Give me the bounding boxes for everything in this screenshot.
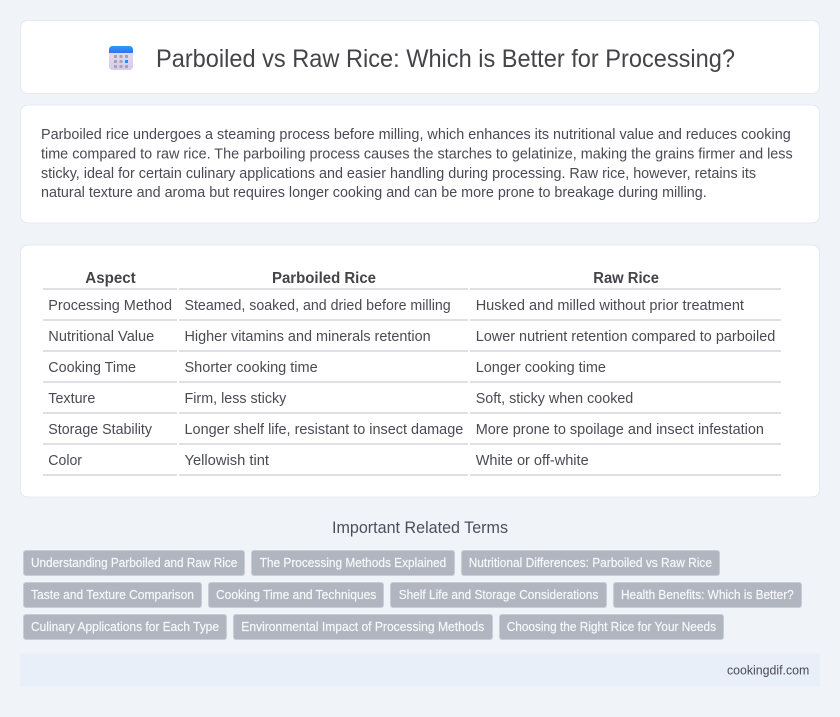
title: Parboiled vs Raw Rice: Which is Better for Processing?	[156, 45, 735, 73]
tag row 1: Understanding Parboiled and Raw Rice	[31, 556, 237, 570]
footer bar	[20, 654, 820, 686]
footer source text: cookingdif.com	[727, 662, 809, 677]
tag row 3: Choosing the Right Rice for Your Needs	[507, 620, 716, 634]
icon: calendar	[109, 46, 133, 70]
tag row 2: Cooking Time and Techniques	[216, 588, 376, 602]
panel: comparison table	[20, 245, 820, 497]
table header row: Parboiled Rice	[272, 270, 376, 287]
table row: storage stability: Storage Stability	[48, 422, 153, 438]
table header row: Aspect	[85, 270, 136, 287]
table row: cooking time: Cooking Time	[48, 360, 136, 376]
tag row 3: Environmental Impact of Processing Methods	[241, 620, 484, 634]
table row: color: Yellowish tint	[184, 453, 269, 469]
table row: texture	[43, 391, 781, 414]
table row: nutritional value	[43, 329, 781, 352]
tag row 2: Shelf Life and Storage Considerations	[399, 588, 598, 602]
panel: header	[20, 20, 820, 94]
tag row 3: Culinary Applications for Each Type	[31, 620, 219, 634]
table row: cooking time: Shorter cooking time	[184, 360, 318, 376]
tag row 2: Health Benefits: Which is Better?	[621, 588, 794, 602]
table row: color: White or off-white	[476, 453, 589, 469]
table row: storage stability: Longer shelf life, resistant to insect damage	[184, 422, 463, 438]
table row: texture: Soft, sticky when cooked	[476, 391, 633, 407]
table row: texture: Texture	[48, 391, 95, 407]
table row: storage stability	[43, 422, 781, 445]
tag row 2	[24, 582, 802, 608]
table row: color	[43, 453, 781, 476]
table row: cooking time: Longer cooking time	[476, 360, 606, 376]
table header row	[43, 270, 781, 290]
text block: introduction paragraph	[41, 127, 793, 201]
table row: texture: Firm, less sticky	[184, 391, 287, 407]
table row: storage stability: More prone to spoilage and insect infestation	[476, 422, 764, 438]
table row: nutritional value: Lower nutrient retention compared to parboiled	[476, 329, 775, 345]
table row: cooking time	[43, 360, 781, 383]
text block: introduction paragraph: natural texture and aroma but requires longer cooking and can be more prone to breakage during milling.	[41, 185, 707, 201]
panel: related term tags	[24, 550, 802, 640]
heading: important related terms: Important Related Terms	[332, 519, 508, 537]
table row: processing method: Processing Method	[48, 298, 172, 314]
text block: introduction paragraph: time compared to raw rice. The parboiling process causes the starches to gelatinize, making the grains firmer and less	[41, 146, 793, 162]
table row: nutritional value: Higher vitamins and minerals retention	[184, 329, 431, 345]
text block: introduction paragraph: sticky, ideal for certain culinary applications and easier handling during processing. Raw rice, however, retains its	[41, 166, 756, 182]
tag row 2: Taste and Texture Comparison	[31, 588, 194, 602]
panel: introduction	[20, 105, 820, 223]
table row: processing method: Husked and milled without prior treatment	[476, 298, 744, 314]
tag row 1: Nutritional Differences: Parboiled vs Raw Rice	[469, 556, 712, 570]
table row: nutritional value: Nutritional Value	[48, 329, 154, 345]
table row: processing method: Steamed, soaked, and dried before milling	[184, 298, 451, 314]
tag row 1	[24, 550, 720, 576]
table header row: Raw Rice	[593, 270, 659, 287]
tag row 1: The Processing Methods Explained	[260, 556, 446, 570]
tag row 3	[24, 614, 724, 640]
text block: introduction paragraph: Parboiled rice undergoes a steaming process before milling, which enhances its nutritional value and reduces cooking	[41, 127, 791, 143]
table row: processing method	[43, 298, 781, 321]
table row: color: Color	[48, 453, 82, 469]
